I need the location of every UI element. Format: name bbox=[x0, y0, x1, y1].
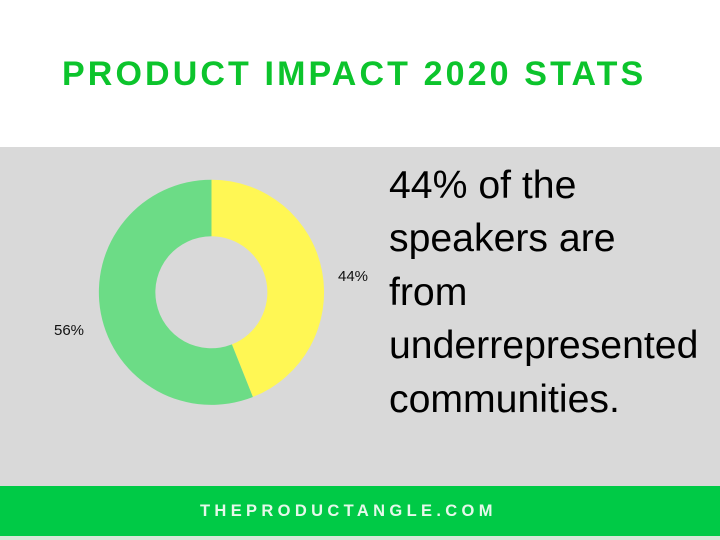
panel: gray stats background bbox=[0, 147, 720, 486]
stat text block bbox=[389, 164, 698, 420]
bottom strip bbox=[0, 536, 720, 540]
stat text block: communities. bbox=[389, 378, 620, 420]
label: 56%: 56% bbox=[54, 322, 84, 339]
footer band bbox=[0, 486, 720, 536]
stat text block: 44% of the bbox=[389, 164, 576, 206]
segment: 56% green bbox=[99, 180, 253, 405]
footer website text: THEPRODUCTANGLE.COM bbox=[200, 502, 497, 520]
stat text block: speakers are bbox=[389, 217, 616, 260]
title: PRODUCT IMPACT 2020 STATS bbox=[62, 55, 646, 93]
donut chart bbox=[54, 180, 368, 405]
label: 44%: 44% bbox=[338, 268, 368, 285]
stat text block: underrepresented bbox=[389, 324, 698, 367]
stat text block: from bbox=[389, 270, 467, 314]
segment: 44% yellow bbox=[212, 180, 324, 397]
